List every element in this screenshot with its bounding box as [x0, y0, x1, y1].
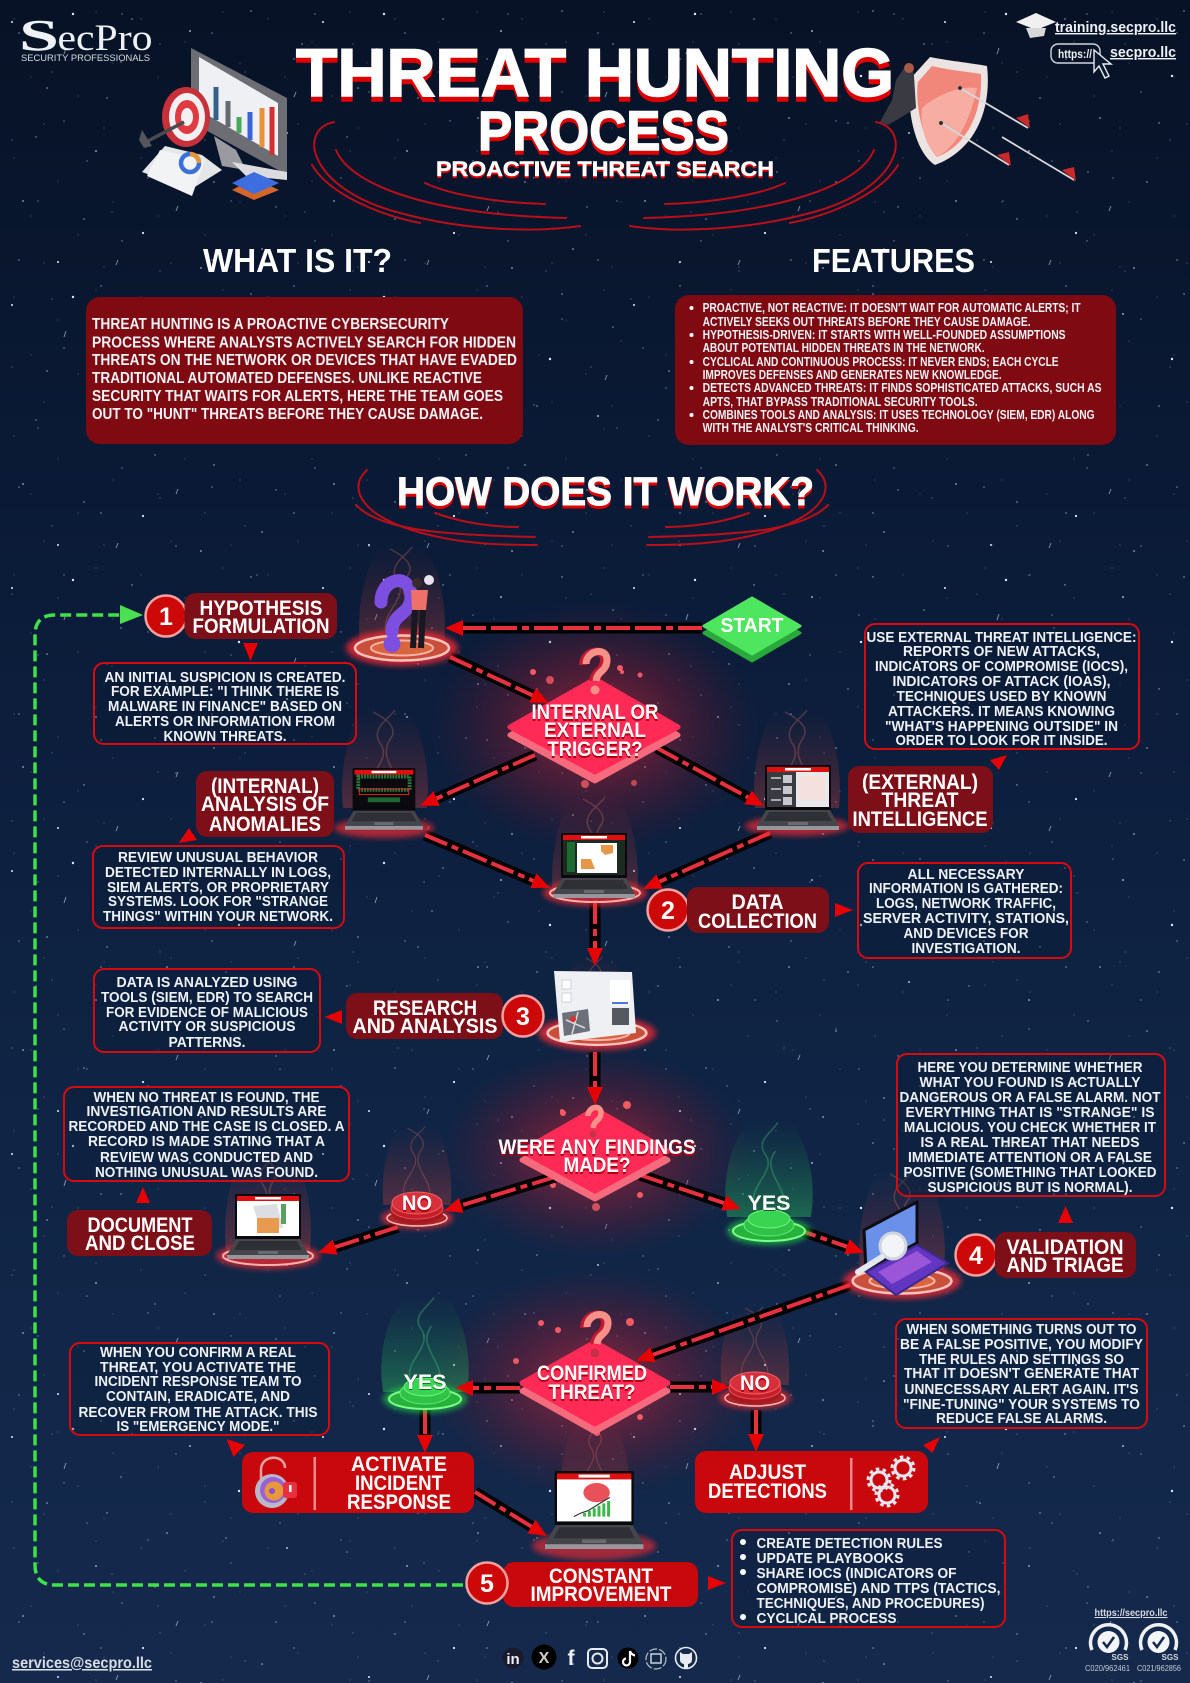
label: internal analysis of anomalies: (INTERNAL)	[211, 775, 319, 798]
icon: monitor with target	[139, 48, 287, 200]
text box: validation: IMMEDIATE ATTENTION OR A FALSE	[908, 1150, 1152, 1166]
text box: external intelligence: INDICATORS OF COMPROMISE (IOCS),	[875, 659, 1128, 675]
step 4: validation and triage: VALIDATION	[1006, 1236, 1124, 1259]
text box: internal analysis: SIEM ALERTS, OR PROPRIETARY	[107, 880, 329, 896]
icon: tiktok	[618, 1648, 638, 1668]
text box: no threat: RECORDED AND THE CASE IS CLOSED. A	[68, 1119, 345, 1135]
text box: no threat: REVIEW WAS CONDUCTED AND	[100, 1150, 313, 1166]
decision: were any findings made	[498, 1107, 696, 1199]
number badge 2	[648, 890, 688, 930]
panel: what is it	[86, 297, 523, 444]
text box: false positive	[896, 1319, 1147, 1428]
text box: no threat: INVESTIGATION AND RESULTS ARE	[86, 1104, 327, 1120]
arrow: document callout	[136, 1187, 150, 1203]
arrow: incident callout	[226, 1439, 245, 1457]
arrow: start to hypothesis	[463, 622, 702, 634]
decision: internal or external trigger: EXTERNAL	[544, 719, 646, 742]
step 1: hypothesis formulation	[146, 593, 337, 639]
text box: incident response: IS "EMERGENCY MODE."	[116, 1419, 280, 1435]
logo	[19, 11, 152, 64]
icon: x	[532, 1644, 556, 1670]
action: adjust detections: ADJUST	[729, 1461, 806, 1484]
decision: internal or external trigger: TRIGGER?	[548, 738, 642, 761]
step 2: data collection: DATA	[732, 891, 784, 914]
icon: shield with arrows and person	[880, 57, 1076, 181]
icon: person with question mark	[346, 575, 458, 666]
text box: hypothesis: FOR EXAMPLE: "I THINK THERE IS	[111, 684, 339, 700]
decision: were any findings made: WERE ANY FINDINGS	[498, 1136, 696, 1159]
decision: internal or external trigger	[510, 651, 678, 781]
arrow: trigger to internal	[437, 755, 535, 798]
panel: features: DETECTS ADVANCED THREATS: IT FINDS SOPHISTICATED ATTACKS, SUCH AS	[703, 381, 1102, 395]
decision: confirmed threat	[522, 1314, 668, 1432]
decision: confirmed threat: THREAT?	[548, 1381, 636, 1404]
logo: ecPro	[58, 18, 152, 59]
action: activate incident response: RESPONSE	[347, 1491, 451, 1514]
list box: improvement actions: COMPROMISE) AND TTPS (TACTICS,	[756, 1581, 1000, 1597]
icon: document laptop	[216, 1194, 320, 1269]
label: external threat intelligence: THREAT	[882, 789, 959, 812]
text box: false positive: UNNECESSARY ALERT AGAIN. IT'S	[904, 1382, 1139, 1398]
arrow: adjust callout	[923, 1437, 940, 1453]
label: external threat intelligence	[848, 766, 993, 833]
footer email: services@secpro.llc	[12, 1655, 152, 1672]
title: THREAT HUNTING	[296, 35, 894, 111]
action: adjust detections	[695, 1451, 928, 1513]
heading: how does it work	[356, 470, 828, 545]
panel: what is it: THREAT HUNTING IS A PROACTIVE CYBERSECURITY	[92, 316, 449, 333]
badge: iso 2: C021/962856	[1137, 1663, 1181, 1673]
start node: START	[720, 615, 784, 637]
node: yes confirmed: YES	[404, 1371, 446, 1394]
panel: features: APTS, THAT BYPASS TRADITIONAL SECURITY TOOLS.	[703, 395, 978, 409]
start node	[704, 598, 800, 661]
certification badges: https://secpro.llc	[1094, 1607, 1168, 1619]
text box: external intelligence	[865, 624, 1139, 749]
node: yes: YES	[748, 1192, 790, 1215]
text box: research: DATA IS ANALYZED USING	[116, 975, 298, 991]
step 3: research and analysis: RESEARCH	[373, 997, 477, 1020]
text box: hypothesis: AN INITIAL SUSPICION IS CREATED.	[104, 670, 346, 686]
arrow: improvement callout	[708, 1576, 726, 1590]
text box: external intelligence: USE EXTERNAL THREAT INTELLIGENCE:	[866, 630, 1136, 646]
text box: validation: SUSPICIOUS BUT IS NORMAL).	[928, 1180, 1132, 1196]
text box: external intelligence: ORDER TO LOOK FOR IT INSIDE.	[896, 733, 1108, 749]
text box: external intelligence: "WHAT'S HAPPENING OUTSIDE" IN	[885, 719, 1118, 735]
icon: instagram	[588, 1649, 607, 1668]
arrow: yes to validation	[793, 1228, 847, 1247]
step 2: data collection	[648, 887, 829, 933]
loop arrow: constant improvement back to hypothesis	[35, 605, 463, 1585]
text box: hypothesis: KNOWN THREATS.	[164, 729, 286, 745]
number badge 5: 5	[480, 1570, 494, 1598]
icon: website link: https://	[1058, 47, 1093, 61]
panel: features: ACTIVELY SEEKS OUT THREATS BEFORE THEY CAUSE DAMAGE.	[703, 315, 1031, 329]
node: no confirmed: NO	[740, 1372, 770, 1395]
text box: false positive: BE A FALSE POSITIVE, YOU MODIFY	[900, 1337, 1143, 1353]
text box: validation: HERE YOU DETERMINE WHETHER	[918, 1060, 1143, 1076]
title: PROACTIVE THREAT SEARCH	[436, 158, 774, 181]
arrow: hypothesis to trigger	[450, 657, 532, 695]
panel: what is it: OUT TO "HUNT" THREATS BEFORE THEY CAUSE DAMAGE.	[92, 406, 483, 423]
text box: external intelligence: TECHNIQUES USED BY KNOWN	[896, 689, 1106, 705]
arrow: incident response to improvement	[475, 1492, 531, 1527]
list box: improvement actions: TECHNIQUES, AND PROCEDURES)	[756, 1596, 985, 1612]
text box: incident response: RECOVER FROM THE ATTACK. THIS	[78, 1405, 318, 1421]
text box: validation: POSITIVE (SOMETHING THAT LOOKED	[904, 1165, 1156, 1181]
title: PROCESS	[478, 99, 729, 162]
step 3: research and analysis: AND ANALYSIS	[352, 1015, 498, 1038]
text box: research: ACTIVITY OR SUSPICIOUS	[118, 1019, 296, 1035]
step 4: validation and triage	[956, 1232, 1136, 1278]
arrow: findings to no	[461, 1177, 555, 1205]
list box: improvement actions: SHARE IOCS (INDICATORS OF	[756, 1566, 957, 1582]
action: activate incident response: ACTIVATE	[351, 1453, 447, 1476]
panel: features: CYCLICAL AND CONTINUOUS PROCESS: IT NEVER ENDS; EACH CYCLE	[703, 355, 1059, 369]
text box: internal analysis: REVIEW UNUSUAL BEHAVIOR	[118, 850, 318, 866]
icon: twitch	[646, 1649, 666, 1669]
logo: SECURITY PROFESSIONALS	[21, 53, 150, 64]
text box: data collection: INFORMATION IS GATHERED:	[869, 881, 1063, 897]
badge: iso 2: SGS	[1162, 1653, 1179, 1662]
number badge 3	[502, 996, 544, 1036]
icon: training link: training.secpro.llc	[1055, 20, 1176, 36]
arrow: confirmed to no	[670, 1382, 712, 1392]
label: external threat intelligence: (EXTERNAL)	[862, 771, 978, 794]
text box: data collection: AND DEVICES FOR	[904, 926, 1029, 942]
panel: features: IMPROVES DEFENSES AND GENERATES NEW KNOWLEDGE.	[703, 368, 1002, 382]
text box: false positive: THE RULES AND SETTINGS SO	[919, 1352, 1124, 1368]
panel: features: HYPOTHESIS-DRIVEN: IT STARTS WITH WELL-FOUNDED ASSUMPTIONS	[703, 328, 1066, 342]
text box: no threat: RECORD IS MADE STATING THAT A	[88, 1134, 325, 1150]
text box: internal analysis	[93, 846, 344, 928]
number badge 1: 1	[159, 603, 173, 631]
panel: what is it: SECURITY THAT WAITS FOR ALERTS, HERE THE TEAM GOES	[92, 388, 503, 405]
number badge 2: 2	[661, 897, 675, 925]
arrow: research to findings	[590, 1052, 600, 1087]
text box: research: TOOLS (SIEM, EDR) TO SEARCH	[101, 990, 313, 1006]
title	[296, 35, 894, 181]
panel: what is it: THREATS ON THE NETWORK OR DEVICES THAT HAVE EVADED	[92, 352, 517, 369]
text box: no threat: NOTHING UNUSUAL WAS FOUND.	[95, 1165, 318, 1181]
step 3: research and analysis	[346, 993, 544, 1039]
arrow: data callout	[835, 903, 853, 917]
text box: false positive: WHEN SOMETHING TURNS OUT TO	[906, 1322, 1136, 1338]
heading: what is it: WHAT IS IT?	[203, 242, 392, 279]
text box: hypothesis	[94, 663, 356, 745]
arrow: hypothesis callout	[243, 643, 258, 661]
text box: external intelligence: ATTACKERS. IT MEANS KNOWING	[888, 704, 1115, 720]
number badge 1	[146, 596, 186, 636]
action: adjust detections: DETECTIONS	[708, 1480, 827, 1503]
text box: external intelligence: INDICATORS OF ATTACK (IOAS),	[892, 674, 1110, 690]
action: activate incident response	[242, 1452, 474, 1514]
icon: research report	[538, 971, 656, 1050]
arrow: internal callout	[179, 828, 197, 843]
node: no: NO	[402, 1192, 432, 1215]
arrow: no to document	[335, 1227, 398, 1247]
text box: validation: DANGEROUS OR A FALSE ALARM. NOT	[900, 1090, 1161, 1106]
arrow: validation to confirmed	[653, 1285, 850, 1355]
text box: validation: WHAT YOU FOUND IS ACTUALLY	[920, 1075, 1141, 1091]
number badge 5	[466, 1562, 508, 1604]
text box: false positive: THAT IT DOESN'T GENERATE THAT	[904, 1366, 1139, 1382]
node: yes confirmed	[383, 1371, 467, 1413]
node: yes	[727, 1192, 811, 1245]
icon: website link: secpro.llc	[1110, 45, 1176, 61]
node: no	[381, 1192, 453, 1229]
panel: features: PROACTIVE, NOT REACTIVE: IT DOESN'T WAIT FOR AUTOMATIC ALERTS; IT	[703, 301, 1081, 315]
list box: improvement actions: CREATE DETECTION RULES	[756, 1536, 943, 1552]
text box: false positive: REDUCE FALSE ALARMS.	[936, 1411, 1107, 1427]
label: internal analysis of anomalies	[196, 771, 334, 837]
text box: internal analysis: THINGS" WITHIN YOUR NETWORK.	[103, 909, 333, 925]
arrow: data collection to research	[590, 900, 600, 948]
arrow: internal to data collection	[425, 835, 533, 881]
text box: validation: MALICIOUS. YOU CHECK WHETHER IT	[904, 1120, 1156, 1136]
panel: features: WITH THE ANALYST'S CRITICAL THINKING.	[703, 421, 919, 435]
step 1: hypothesis formulation: HYPOTHESIS	[200, 597, 322, 620]
label: internal analysis of anomalies: ANOMALIES	[209, 813, 321, 836]
decision glows	[430, 602, 760, 1498]
social icons	[502, 1644, 696, 1670]
icon: linkedin: in	[506, 1651, 520, 1668]
text box: incident response: WHEN YOU CONFIRM A REAL	[100, 1345, 296, 1361]
arrow: external to data collection	[660, 833, 770, 882]
text box: internal analysis: SYSTEMS. LOOK FOR "STRANGE	[108, 894, 328, 910]
icon: linkedin	[502, 1648, 524, 1668]
text box: data collection: LOGS, NETWORK TRAFFIC,	[876, 896, 1056, 912]
action: activate incident response: INCIDENT	[355, 1472, 443, 1495]
arrow: trigger to external	[657, 748, 748, 797]
label: document and close: AND CLOSE	[85, 1232, 195, 1255]
badge: iso 1: SGS	[1112, 1653, 1129, 1662]
label: document and close	[67, 1210, 212, 1256]
step 5: constant improvement: IMPROVEMENT	[530, 1583, 672, 1606]
certification badges	[1085, 1607, 1181, 1673]
text box: validation: EVERYTHING THAT IS "STRANGE" IS	[906, 1105, 1155, 1121]
text box: no threat: WHEN NO THREAT IS FOUND, THE	[94, 1090, 320, 1106]
label: document and close: DOCUMENT	[88, 1214, 193, 1237]
text box: data collection: INVESTIGATION.	[912, 941, 1020, 957]
panel: what is it: PROCESS WHERE ANALYSTS ACTIVELY SEARCH FOR HIDDEN	[92, 334, 516, 352]
number badge 3: 3	[516, 1003, 530, 1031]
text box: incident response	[70, 1343, 329, 1435]
text box: research	[94, 969, 320, 1052]
label: external threat intelligence: INTELLIGENCE	[852, 808, 988, 831]
arrow: no to adjust detections	[750, 1410, 762, 1434]
icon: x: X	[539, 1650, 550, 1667]
smoke behind icons	[225, 545, 945, 1500]
step 5: constant improvement	[466, 1562, 698, 1607]
panel: features: COMBINES TOOLS AND ANALYSIS: IT USES TECHNOLOGY (SIEM, EDR) ALONG	[703, 408, 1095, 422]
icon: website link	[1051, 44, 1176, 78]
list box: improvement actions: UPDATE PLAYBOOKS	[756, 1551, 904, 1567]
logo: S	[19, 11, 59, 60]
icon: open lock	[255, 1458, 297, 1508]
text box: incident response: CONTAIN, ERADICATE, AND	[106, 1389, 290, 1405]
icon: github	[676, 1648, 696, 1668]
title swooshes	[312, 122, 898, 230]
arrow: confirmed to yes	[473, 1382, 520, 1394]
panel: features	[675, 295, 1116, 445]
arrow: findings to yes	[640, 1175, 724, 1203]
label: internal analysis of anomalies: ANALYSIS OF	[201, 793, 329, 816]
badge: iso 1: C020/962461	[1085, 1663, 1130, 1673]
text box: external intelligence: REPORTS OF NEW ATTACKS,	[903, 644, 1100, 660]
text box: research: FOR EVIDENCE OF MALICIOUS	[106, 1005, 308, 1021]
text box: no threat	[64, 1087, 349, 1181]
icon: gears	[868, 1457, 914, 1506]
text box: data collection: SERVER ACTIVITY, STATIONS,	[863, 911, 1069, 927]
arrow: research callout	[324, 1010, 342, 1024]
step 1: hypothesis formulation: FORMULATION	[192, 615, 330, 638]
text box: internal analysis: DETECTED INTERNALLY IN LOGS,	[105, 865, 331, 881]
text box: data collection: ALL NECESSARY	[908, 867, 1025, 883]
heading: how does it work: HOW DOES IT WORK?	[397, 470, 814, 514]
icon: facebook: f	[568, 1647, 576, 1670]
decision: internal or external trigger: INTERNAL OR	[532, 701, 658, 724]
badge: iso 2	[1137, 1625, 1181, 1673]
step 4: validation and triage: AND TRIAGE	[1006, 1254, 1124, 1277]
number badge 4	[956, 1234, 996, 1276]
list box: improvement actions: CYCLICAL PROCESS	[756, 1611, 897, 1627]
text box: incident response: INCIDENT RESPONSE TEAM TO	[94, 1374, 302, 1390]
icon: external intelligence laptop	[745, 765, 849, 836]
text box: false positive: "FINE-TUNING" YOUR SYSTEMS TO	[903, 1397, 1140, 1413]
decision: confirmed threat: CONFIRMED	[537, 1362, 647, 1385]
icon: internal analysis laptop	[334, 768, 434, 838]
list box: improvement actions	[732, 1530, 1005, 1627]
decision: were any findings made: MADE?	[564, 1154, 630, 1177]
arrow: validation callout	[1058, 1206, 1073, 1223]
text box: hypothesis: ALERTS OR INFORMATION FROM	[115, 714, 335, 730]
arrow: yes to incident response	[420, 1410, 430, 1435]
text box: hypothesis: MALWARE IN FINANCE" BASED ON	[108, 699, 342, 715]
icon: validation laptop with magnifier	[843, 1202, 961, 1299]
panel: features: ABOUT POTENTIAL HIDDEN THREATS IN THE NETWORK.	[703, 341, 985, 355]
text box: research: PATTERNS.	[168, 1035, 246, 1051]
number badge 4: 4	[969, 1242, 983, 1270]
icon: training link	[1016, 13, 1176, 38]
step 2: data collection: COLLECTION	[698, 910, 817, 933]
heading: features: FEATURES	[812, 242, 975, 279]
badge: iso 1	[1085, 1625, 1130, 1673]
text box: incident response: THREAT, YOU ACTIVATE THE	[100, 1360, 296, 1376]
text box: validation: IS A REAL THREAT THAT NEEDS	[920, 1135, 1140, 1151]
arrow: external callout	[990, 755, 1007, 770]
icon: improvement laptop	[532, 1471, 656, 1560]
step 5: constant improvement: CONSTANT	[549, 1565, 653, 1588]
text box: validation	[897, 1054, 1165, 1196]
text box: data collection	[858, 863, 1071, 958]
icon: data collection laptop	[543, 833, 647, 906]
panel: what is it: TRADITIONAL AUTOMATED DEFENSES. UNLIKE REACTIVE	[92, 370, 482, 387]
node: no confirmed	[719, 1372, 791, 1409]
